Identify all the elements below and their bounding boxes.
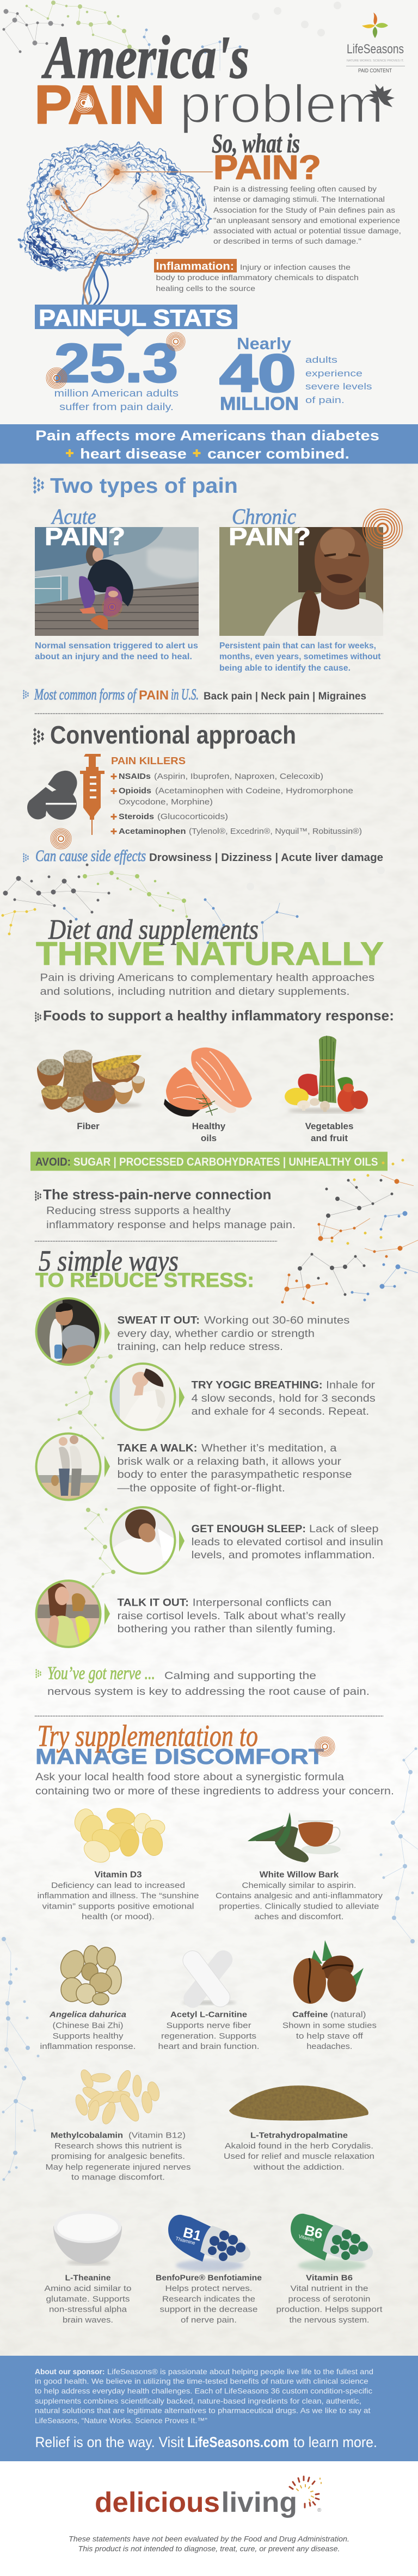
- sponsor logo: LifeSeasons: LifeSeasons: [347, 42, 404, 57]
- illustration: brain with pain points: [19, 141, 213, 305]
- disclaimer: [69, 2535, 349, 2553]
- step: get enough sleep: GET ENOUGH SLEEP:: [192, 1524, 306, 1535]
- text block: pain definition: Association for the Study of Pain defines pain as: [213, 206, 395, 214]
- ingredient: angelica dahurica: Angelica dahurica: [49, 2010, 126, 2019]
- heading: try supplementation to manage discomfort: Try supplementation to: [37, 1719, 258, 1753]
- ingredient: vitamin D3: Vitamin D3: [95, 1870, 142, 1880]
- image: sliced root: [56, 1946, 121, 2005]
- panel: chronic pain: months, even years, sometimes without: [219, 652, 381, 661]
- callout: can cause side effects: Can cause side effects: [35, 847, 146, 865]
- text block: pain killers list: (Tylenol®, Excedrin®, Nyquil™, Robitussin®): [189, 827, 362, 836]
- image: tablets: [73, 2068, 161, 2126]
- panel: about our sponsor: LifeSeasons® is passionate about helping people live life to the fullest and: [107, 2367, 373, 2376]
- panel: acute pain: Normal sensation triggered to alert us: [35, 641, 198, 651]
- heading: 5 simple ways to reduce stress: 5 simple ways: [39, 1244, 179, 1277]
- logo: delicious living: living: [221, 2487, 297, 2518]
- sponsor logo: LifeSeasons: PAID CONTENT: [358, 68, 392, 74]
- food image: salmon steaks: [164, 1048, 252, 1117]
- ingredient: L-theanine: Amino acid similar to: [45, 2284, 132, 2293]
- ingredient: benfotiamine: BenfoPure® Benfotiamine: [156, 2274, 262, 2282]
- photo: couple walking on beach: [38, 1435, 99, 1499]
- ingredient: L-theanine: [45, 2210, 132, 2325]
- image: B1 capsule: Thiamine: [175, 2236, 196, 2246]
- step: take a walk: —the opposite of fight-or-flight.: [118, 1483, 285, 1494]
- title: PAIN with target rings: PAIN: [34, 75, 165, 135]
- text block: stress-pain-nerve connection: Reducing stress supports a healthy: [46, 1205, 231, 1217]
- molecule network: middle: [3, 849, 381, 952]
- ingredient: angelica dahurica: Supports healthy: [52, 2032, 124, 2041]
- heading: 5 simple ways to reduce stress: [35, 1244, 254, 1291]
- food labels: Vegetables: [305, 1121, 353, 1131]
- image: B6 capsule: Vitamin: [298, 2233, 315, 2243]
- heading: try supplementation to manage discomfort: [35, 1719, 335, 1769]
- ingredient: white willow bark: Contains analgesic and anti-inflammatory: [216, 1891, 383, 1900]
- callout: you've got nerve: You’ve got nerve ...: [47, 1663, 155, 1683]
- image: B6 capsule: [291, 2214, 373, 2271]
- text block: pain killers list: Steroids: [119, 812, 154, 821]
- photo: woman relaxing: [112, 1369, 165, 1418]
- food image: vegetables and fruit: [285, 1036, 368, 1113]
- step: try yogic breathing: Inhale for: [326, 1379, 376, 1391]
- ingredient: caffeine: to help stave off: [296, 2032, 364, 2041]
- panel: about our sponsor: LifeSeasons.com: [187, 2434, 289, 2450]
- logo: delicious living: [95, 2476, 322, 2518]
- panel: about our sponsor: [0, 2356, 418, 2461]
- text block: ask your local health food store: [35, 1772, 394, 1797]
- step: try yogic breathing: and exhale for 4 seconds. Repeat.: [192, 1406, 369, 1417]
- ingredient: methylcobalamin: to manage discomfort.: [71, 2172, 165, 2182]
- step: get enough sleep: levels, and promotes inflammation.: [192, 1550, 375, 1561]
- photo: runner holding knee: [35, 527, 199, 636]
- panel: about our sponsor: About our sponsor:: [35, 2367, 104, 2376]
- text block: pain definition: [213, 184, 401, 245]
- ingredient: vitamin D3: vitamin” supports positive emotional: [42, 1902, 194, 1911]
- callout: you've got nerve: Calming and supporting the: [164, 1670, 316, 1682]
- text block: pain killers list: NSAIDs: [119, 772, 151, 781]
- ingredient: methylcobalamin: May help regenerate injured nerves: [46, 2163, 190, 2172]
- heading: try supplementation to manage discomfort: MANAGE DISCOMFORT: [35, 1745, 324, 1769]
- photo: man holding neck: [219, 525, 383, 636]
- step: get enough sleep: [110, 1507, 383, 1574]
- image: softgels: [72, 1806, 165, 1867]
- image: B1 capsule: [168, 2215, 250, 2271]
- ingredient: caffeine: [282, 1940, 377, 2051]
- ingredient: vitamin B6: production. Helps support: [276, 2305, 383, 2314]
- stat: nearly 40 million: of pain.: [305, 395, 345, 405]
- ingredient: caffeine: headaches.: [306, 2042, 352, 2051]
- stat: nearly 40 million: MILLION: [220, 394, 299, 414]
- callout: inflammation: body to produce inflammatory chemicals to dispatch: [156, 273, 359, 282]
- sponsor logo: LifeSeasons: NATURE WORKS. SCIENCE PROVES IT.: [347, 59, 404, 63]
- icon: target rings: [51, 828, 71, 849]
- food labels: Healthy: [192, 1121, 226, 1131]
- step: try yogic breathing: 4 slow seconds, hold for 3 seconds: [192, 1393, 376, 1404]
- heading: two types of pain: Two types of pain: [50, 474, 238, 498]
- callout: most common forms of pain: [23, 686, 366, 703]
- photo: man with towel: [37, 1299, 99, 1364]
- ingredient: benfotiamine: Helps protect nerves.: [165, 2284, 253, 2293]
- callout: most common forms of pain: Back pain | Neck pain | Migraines: [204, 691, 366, 702]
- heading: thrive naturally: [36, 914, 384, 972]
- text block: pain definition: Pain is a distressing feeling often caused by: [213, 184, 377, 193]
- title: America's: America's: [41, 24, 249, 91]
- image: coffee beans: [292, 1940, 364, 2006]
- banner: pain affects more Americans: cancer combined.: [207, 445, 349, 462]
- step: sweat it out: [35, 1298, 349, 1365]
- stat: 25.3 million: suffer from pain daily.: [59, 401, 174, 412]
- step: talk it out: [35, 1580, 346, 1648]
- ingredient: acetyl L-carnitine: regeneration. Supports: [161, 2032, 256, 2041]
- callout: inflammation: Injury or infection causes the: [240, 263, 351, 271]
- text block: ask your local health food store: Ask your local health food store about a synergistic formula: [35, 1772, 344, 1783]
- logo: delicious living: delicious: [95, 2487, 220, 2518]
- step: take a walk: body to enter the parasympathetic response: [118, 1469, 352, 1481]
- ingredient: benfotiamine: of nerve pain.: [181, 2315, 237, 2325]
- panel: chronic pain: PAIN?: [229, 523, 311, 550]
- ingredient: vitamin D3: inflammation and illness. The “sunshine: [37, 1891, 199, 1900]
- ingredient: vitamin B6: Vitamin B6: [306, 2274, 353, 2282]
- stat: nearly 40 million: adults: [305, 355, 337, 365]
- ingredient: L-tetrahydropalmatine: [224, 2085, 374, 2172]
- stat: 25.3 million: 25.3: [54, 333, 178, 394]
- ingredient: L-theanine: non-stressful alpha: [49, 2305, 127, 2314]
- callout: you've got nerve: nervous system is key to addressing the root cause of pain.: [47, 1686, 370, 1698]
- step: sweat it out: Working out 30-60 minutes: [204, 1315, 349, 1326]
- food labels: Fiber: [77, 1121, 100, 1131]
- icon: pills: [27, 771, 77, 820]
- step: try yogic breathing: [110, 1363, 376, 1431]
- stat: nearly 40 million: [219, 334, 372, 414]
- text block: stress-pain-nerve connection: inflammatory response and helps manage pain.: [46, 1219, 296, 1231]
- ingredient: benfotiamine: Research indicates the: [162, 2294, 255, 2304]
- step: sweat it out: every day, whether cardio or strength: [118, 1328, 315, 1340]
- banner: avoid: SUGAR | PROCESSED CARBOHYDRATES | UNHEALTHY OILS: [73, 1156, 378, 1168]
- image: powder bowl: [53, 2210, 122, 2265]
- panel: chronic pain: being able to identify the cause.: [219, 664, 351, 673]
- molecule network: top: [4, 3, 337, 74]
- molecule network: right: [282, 1160, 418, 1303]
- ingredient: white willow bark: properties. Clinically studied to alleviate: [219, 1902, 379, 1911]
- ingredient: methylcobalamin: Methylcobalamin: [51, 2131, 123, 2140]
- photo: women talking: [37, 1582, 99, 1646]
- text block: stress-pain-nerve connection: [35, 1186, 296, 1231]
- title: problem with burst: problem: [180, 74, 384, 134]
- ingredient: white willow bark: [216, 1812, 383, 1921]
- panel: chronic pain: Persistent pain that can last for weeks,: [219, 641, 376, 651]
- text block: complementary approaches: and solutions, including nutrition and dietary supplements.: [40, 986, 349, 998]
- step: get enough sleep: Lack of sleep: [309, 1524, 379, 1535]
- panel: about our sponsor: LifeSeasons, “Nature Works. Science Proves It.™”: [35, 2416, 207, 2425]
- ingredient: angelica dahurica: inflammation response.: [40, 2042, 136, 2051]
- panel: about our sponsor: natural solutions that are legitimate alternatives to pharmaceutical drugs. As we like to say at: [35, 2406, 371, 2415]
- ingredient: L-tetrahydropalmatine: Used for relief and muscle relaxation: [224, 2152, 374, 2161]
- ingredient: vitamin B6: process of serotonin: [288, 2294, 370, 2304]
- callout: most common forms of pain: PAIN: [139, 688, 169, 703]
- molecule network: green center: [59, 1357, 113, 1587]
- heading: Painful Stats banner: PAINFUL STATS: [39, 305, 232, 331]
- image: white capsules: [179, 1947, 236, 2011]
- ingredient: vitamin D3: health (or mood).: [82, 1912, 155, 1921]
- ingredient: vitamin D3: Deficiency can lead to increased: [51, 1881, 185, 1890]
- ingredient: methylcobalamin: (Vitamin B12): [128, 2131, 186, 2140]
- banner: avoid: [30, 1152, 388, 1171]
- ingredient: caffeine: (natural): [330, 2010, 366, 2019]
- food labels: oils: [201, 1133, 217, 1143]
- panel: acute pain: PAIN?: [45, 523, 125, 550]
- panel: acute pain: Acute: [51, 504, 96, 529]
- text block: pain definition: "an unpleasant sensory and emotional experience: [213, 216, 400, 225]
- text block: pain definition: associated with actual or potential tissue damage,: [213, 226, 401, 235]
- panel: acute pain: [35, 504, 199, 661]
- panel: about our sponsor: supplements combines scientifically backed, nature-based ingredients for clean, authentic,: [35, 2397, 361, 2405]
- disclaimer: This product is not intended to diagnose, treat, cure, or prevent any disease.: [78, 2544, 340, 2553]
- heading: So, what is PAIN?: PAIN?: [213, 149, 321, 187]
- heading: thrive naturally: THRIVE NATURALLY: [36, 936, 384, 972]
- ingredient: benfotiamine: [156, 2215, 262, 2325]
- step: talk it out: raise cortisol levels. Talk about what’s really: [118, 1611, 346, 1622]
- ingredient: white willow bark: White Willow Bark: [260, 1870, 339, 1880]
- disclaimer: These statements have not been evaluated by the Food and Drug Administration.: [69, 2535, 349, 2543]
- ingredient: acetyl L-carnitine: [158, 1947, 259, 2051]
- text block: ask your local health food store: containing two or more of these ingredients to address your concern.: [35, 1786, 394, 1797]
- ingredient: acetyl L-carnitine: Acetyl L-Carnitine: [170, 2010, 247, 2019]
- callout: most common forms of pain: in U.S.: [171, 686, 199, 703]
- banner: pain affects more Americans: Pain affects more Americans than diabetes: [35, 428, 379, 444]
- stat: nearly 40 million: 40: [219, 343, 296, 403]
- text block: pain killers list: Opioids: [119, 787, 151, 795]
- text block: pain definition: or described in terms of such damage.": [213, 237, 361, 245]
- ingredient: L-tetrahydropalmatine: L-Tetrahydropalmatine: [250, 2131, 348, 2140]
- banner: pain affects more Americans: [0, 424, 418, 463]
- panel: acute pain: about an injury and the need to heal.: [35, 652, 192, 661]
- step: take a walk: [35, 1433, 352, 1501]
- ingredient: vitamin B6: the nervous system.: [290, 2315, 369, 2325]
- banner: pain affects more Americans: heart disease: [80, 445, 187, 462]
- step: sweat it out: SWEAT IT OUT:: [118, 1315, 200, 1326]
- ingredient: angelica dahurica: (Chinese Bai Zhi): [52, 2021, 123, 2030]
- ingredient: L-theanine: L-Theanine: [65, 2274, 111, 2282]
- heading: 5 simple ways to reduce stress: TO REDUCE STRESS:: [35, 1269, 254, 1291]
- heading: conventional approach: Conventional approach: [50, 721, 296, 749]
- ingredient: white willow bark: aches and discomfort.: [255, 1912, 344, 1921]
- panel: about our sponsor: in good health. We believe in utilizing the time-tested benefits of nature with clinical science: [35, 2377, 368, 2386]
- ingredient: acetyl L-carnitine: Supports nerve fiber: [167, 2021, 251, 2030]
- food labels: and fruit: [311, 1133, 348, 1143]
- step: take a walk: TAKE A WALK:: [118, 1442, 197, 1454]
- icon: syringe: [80, 754, 104, 835]
- panel: about our sponsor: to help address everyday health challenges. Each of LifeSeasons 36 custom condition-specific: [35, 2387, 372, 2395]
- ingredient: vitamin B6: Vital nutrient in the: [291, 2284, 368, 2293]
- callout: can cause side effects: [23, 847, 383, 865]
- text block: pain killers list: [111, 755, 362, 836]
- callout: inflammation: Inflammation:: [156, 261, 234, 273]
- text block: pain killers list: (Aspirin, Ibuprofen, Naproxen, Celecoxib): [154, 772, 323, 781]
- logo: delicious living: ®: [317, 2507, 322, 2513]
- ingredient: white willow bark: Chemically similar to aspirin.: [242, 1881, 356, 1890]
- panel: about our sponsor: to learn more.: [293, 2434, 377, 2450]
- molecule network: blue sides: [3, 1749, 418, 2179]
- food labels: [77, 1121, 353, 1143]
- heading: thrive naturally: Diet and supplements: [48, 914, 259, 945]
- ingredient: L-theanine: brain waves.: [63, 2315, 113, 2325]
- step: get enough sleep: leads to elevated cortisol and insulin: [192, 1537, 383, 1548]
- step: try yogic breathing: TRY YOGIC BREATHING:: [192, 1379, 323, 1391]
- ingredient: vitamin B6: [276, 2214, 383, 2325]
- step: talk it out: bothering you rather than silently fuming.: [118, 1624, 336, 1635]
- text block: pain killers list: Acetaminophen: [119, 827, 186, 836]
- ingredient: methylcobalamin: Research shows this nutrient is: [54, 2141, 182, 2151]
- ingredient: angelica dahurica: [40, 1946, 136, 2051]
- step: talk it out: Interpersonal conflicts can: [193, 1597, 331, 1609]
- callout: most common forms of pain: Most common forms of: [34, 686, 137, 703]
- ingredient: L-tetrahydropalmatine: without the addiction.: [253, 2163, 345, 2172]
- text block: pain killers list: (Glucocorticoids): [157, 812, 228, 821]
- ingredient: methylcobalamin: promising for analgesic benefits.: [51, 2152, 185, 2161]
- photo: woman sleeping: [112, 1508, 174, 1565]
- stat: nearly 40 million: Nearly: [237, 334, 292, 353]
- text block: pain definition: intense or damaging stimuli. The International: [213, 195, 385, 203]
- text block: stress-pain-nerve connection: The stress-pain-nerve connection: [43, 1186, 271, 1203]
- food image: fiber grains: [37, 1050, 145, 1113]
- ingredient: L-theanine: glutamate. Supports: [46, 2294, 130, 2304]
- image: B1 capsule: B1: [182, 2224, 203, 2244]
- banner: avoid: AVOID:: [35, 1156, 71, 1168]
- stat: 25.3 million: [46, 332, 185, 412]
- ingredient: benfotiamine: support in the decrease: [160, 2305, 258, 2314]
- panel: chronic pain: Chronic: [232, 504, 296, 529]
- text block: complementary approaches: Pain is driving Americans to complementary health approaches: [40, 973, 374, 983]
- step: sweat it out: training, can help reduce stress.: [118, 1341, 283, 1353]
- image: B6 capsule: B6: [303, 2222, 324, 2242]
- heading: So, what is PAIN?: [212, 128, 321, 187]
- ingredient: methylcobalamin: [46, 2068, 190, 2182]
- ingredient: caffeine: Shown in some studies: [282, 2021, 377, 2030]
- stat: nearly 40 million: severe levels: [305, 381, 372, 392]
- panel: about our sponsor: Relief is on the way. Visit: [35, 2434, 184, 2450]
- ingredient: vitamin D3: [37, 1806, 199, 1921]
- stat: 25.3 million: million American adults: [54, 388, 179, 399]
- step: talk it out: TALK IT OUT:: [118, 1597, 189, 1609]
- text block: complementary approaches: [40, 973, 374, 998]
- text block: pain killers list: PAIN KILLERS: [111, 755, 186, 766]
- callout: you've got nerve: [35, 1663, 370, 1698]
- callout: inflammation: [154, 259, 359, 293]
- text block: pain killers list: Oxycodone, Morphine): [119, 797, 213, 807]
- callout: can cause side effects: Drowsiness | Dizziness | Acute liver damage: [149, 852, 383, 864]
- heading: foods to support: Foods to support a healthy inflammatory response:: [43, 1007, 394, 1024]
- ingredient: caffeine: Caffeine: [292, 2010, 328, 2019]
- ingredient: L-tetrahydropalmatine: Akaloid found in the herb Corydalis.: [225, 2141, 373, 2151]
- sponsor logo: LifeSeasons: [346, 13, 405, 74]
- step: take a walk: brisk walk or a relaxing bath, it allows your: [118, 1456, 342, 1467]
- step: take a walk: Whether it’s meditation, a: [201, 1442, 337, 1454]
- heading: So, what is PAIN?: So, what is: [212, 128, 300, 158]
- panel: chronic pain: [219, 504, 402, 673]
- callout: inflammation: healing cells to the source: [156, 284, 255, 293]
- stat: nearly 40 million: experience: [305, 368, 362, 379]
- text block: pain killers list: (Acetaminophen with Codeine, Hydromorphone: [155, 787, 353, 795]
- image: tea and bark: [248, 1812, 341, 1862]
- image: corydalis herb pile: [229, 2085, 368, 2121]
- ingredient: acetyl L-carnitine: heart and brain function.: [158, 2042, 259, 2051]
